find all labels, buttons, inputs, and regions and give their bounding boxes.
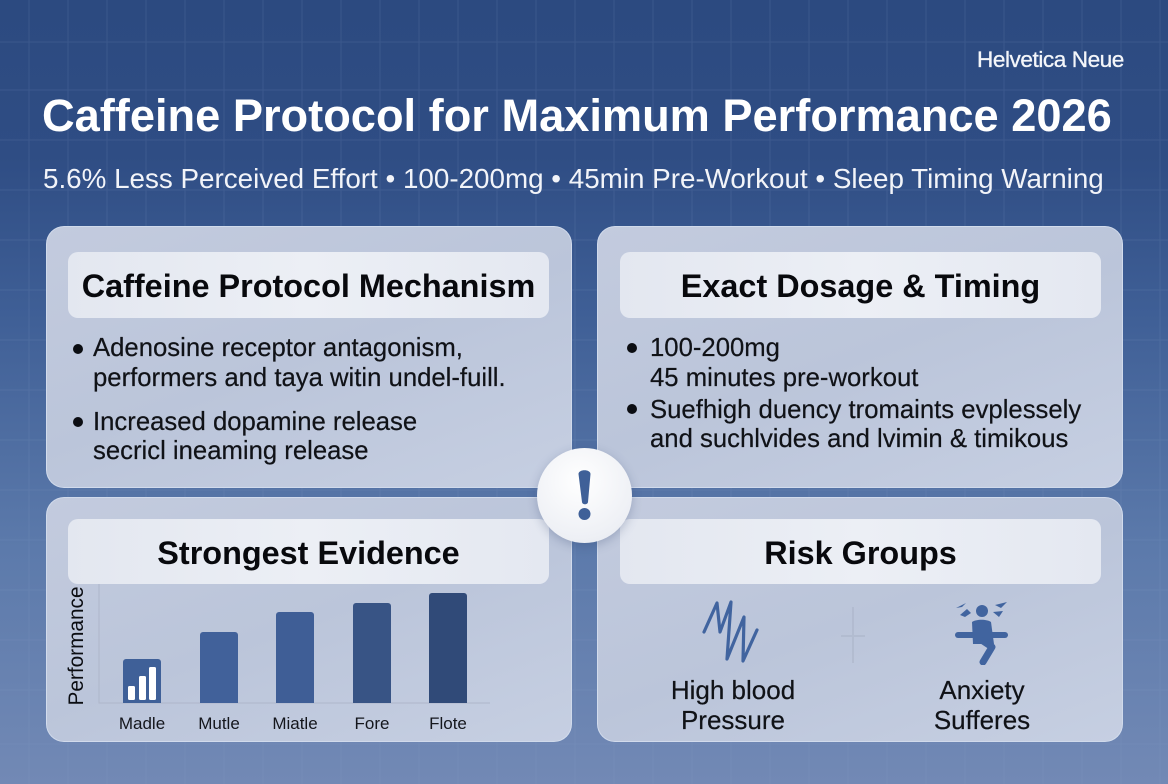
bullet list: dosage: 100-200mg — [650, 334, 780, 362]
warning badge — [537, 448, 632, 543]
label: high blood pressure — [671, 675, 795, 735]
label: high blood pressure: Pressure — [681, 705, 785, 735]
bullet list: dosage — [627, 334, 1082, 453]
heading: mechanism: Caffeine Protocol Mechanism — [82, 268, 535, 304]
bullet list: dosage: and suchlvides and lvimin & timikous — [650, 425, 1068, 453]
bullet list: mechanism: Adenosine receptor antagonism, — [93, 334, 463, 362]
panel: caffeine protocol mechanism — [46, 226, 572, 488]
font label: Helvetica Neue — [977, 47, 1124, 72]
bar labels: Flote — [429, 714, 467, 733]
title: Caffeine Protocol for Maximum Performance 2026 — [42, 90, 1112, 141]
bullet list: mechanism — [73, 334, 506, 465]
bar chart — [65, 584, 490, 733]
heading: evidence: Strongest Evidence — [157, 535, 460, 571]
heading: risk groups — [620, 519, 1101, 584]
bullet list: dosage: 45 minutes pre-workout — [650, 364, 918, 392]
bullet list: dosage: Suefhigh duency tromaints evplessely — [650, 396, 1081, 424]
panel: risk groups — [597, 497, 1123, 742]
bar 4 — [353, 603, 391, 703]
icon: exclamation mark — [578, 470, 590, 520]
bar labels: Fore — [355, 714, 389, 733]
heading: evidence — [68, 519, 549, 584]
heading: dosage — [620, 252, 1101, 318]
bullet list: mechanism: secricl ineaming release — [93, 437, 369, 465]
bar labels — [119, 714, 467, 733]
heading: risk groups: Risk Groups — [764, 535, 957, 571]
label: anxiety sufferers: Sufferes — [934, 705, 1030, 735]
bar labels: Miatle — [272, 714, 318, 733]
bar 1 with icon — [123, 659, 161, 703]
axis label: Performance — [65, 586, 88, 706]
bullet list: mechanism: performers and taya witin undel-fuill. — [93, 364, 506, 392]
label: anxiety sufferers: Anxiety — [939, 675, 1025, 705]
bullet list: mechanism: Increased dopamine release — [93, 408, 417, 436]
heading: dosage: Exact Dosage & Timing — [681, 268, 1040, 304]
bar 2 — [200, 632, 238, 703]
icon: high blood pressure zigzag — [702, 600, 759, 663]
bar labels: Mutle — [198, 714, 240, 733]
panel: exact dosage and timing — [597, 226, 1123, 488]
panel: strongest evidence — [46, 497, 572, 742]
bar 5 — [429, 593, 467, 703]
heading: mechanism — [68, 252, 549, 318]
label: high blood pressure: High blood — [671, 675, 795, 705]
subtitle: 5.6% Less Perceived Effort • 100-200mg • 45min Pre-Workout • Sleep Timing Warning — [43, 163, 1104, 194]
bar 3 — [276, 612, 314, 703]
icon: anxiety figure — [955, 602, 1008, 665]
bar labels: Madle — [119, 714, 165, 733]
divider cross — [841, 607, 865, 663]
label: anxiety sufferers — [934, 675, 1030, 735]
